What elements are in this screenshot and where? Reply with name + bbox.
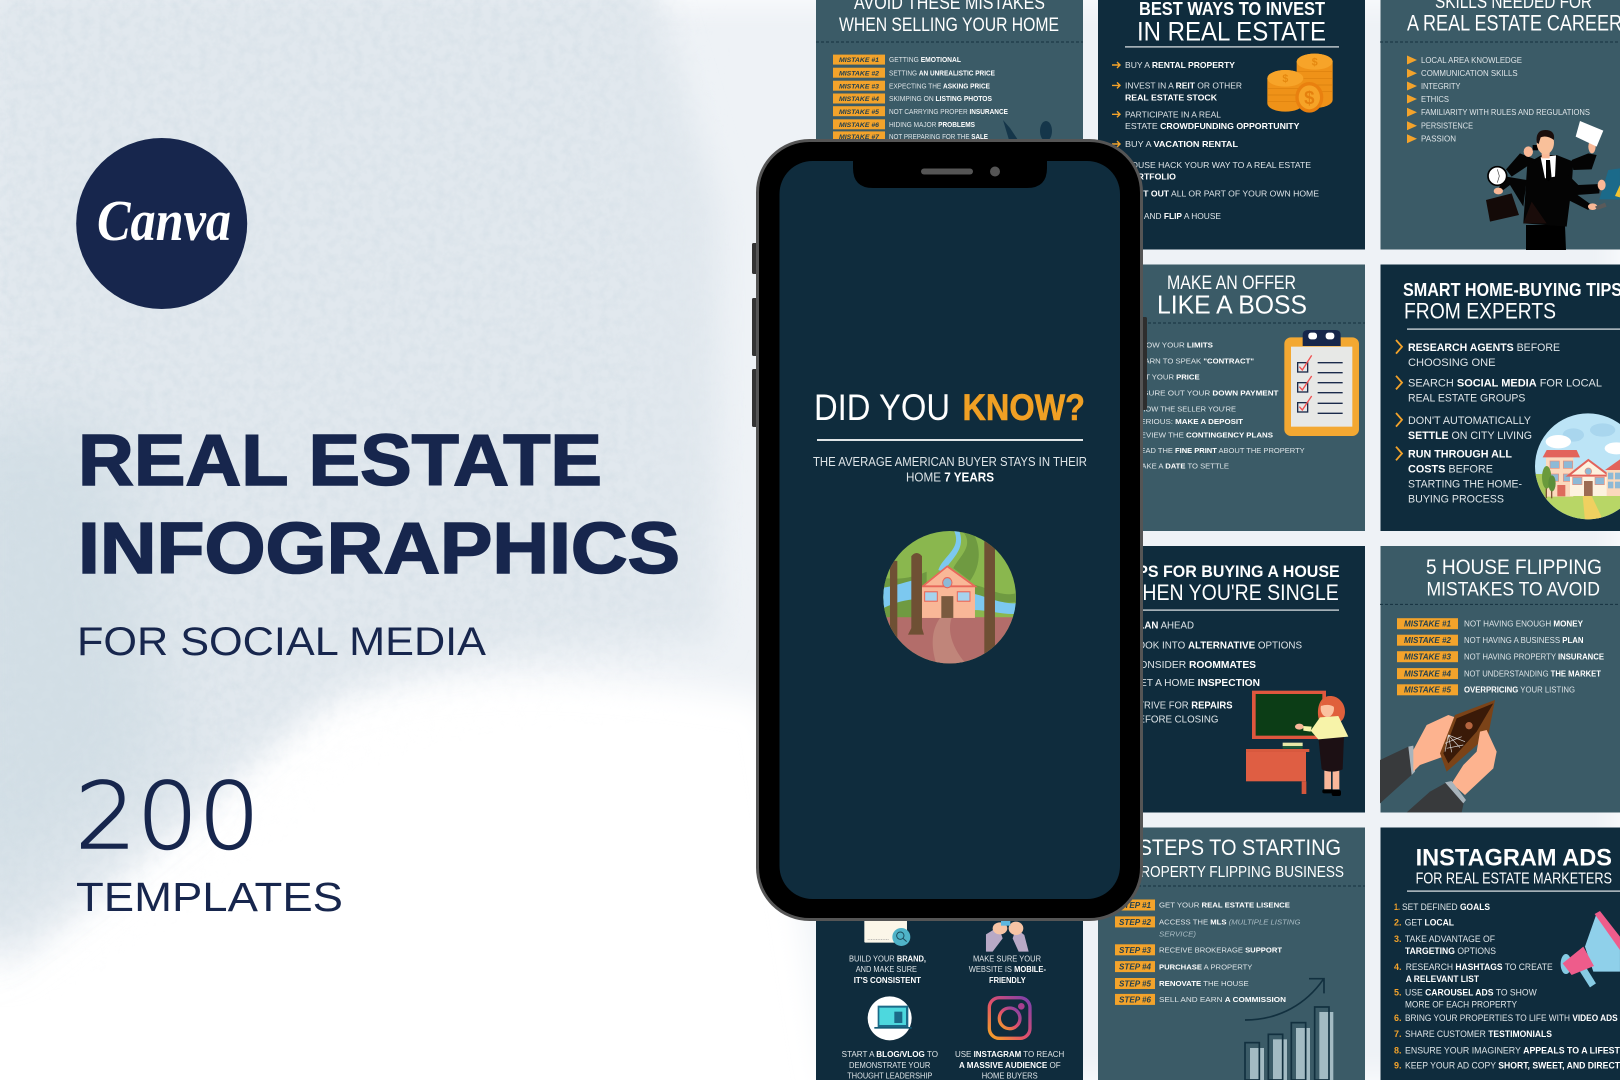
mistake list: MISTAKE #5 (839, 109, 879, 116)
brand tip: AND MAKE SURE (856, 965, 917, 974)
steps list: SERVICE) (1159, 929, 1197, 938)
panel: best ways to invest (1098, 0, 1365, 250)
subtitle: FOR SOCIAL MEDIA (77, 620, 486, 664)
skills list: ETHICS (1421, 95, 1449, 104)
illustration: teacher at chalkboard (1246, 691, 1348, 796)
tips list: LOOK INTO ALTERNATIVE OPTIONS (1132, 640, 1302, 651)
list: PORTFOLIO (1125, 172, 1176, 182)
numbered list: A RELEVANT LIST (1406, 974, 1479, 984)
panel: make an offer like a boss (1098, 264, 1365, 531)
phone body (758, 140, 1142, 920)
heading (1157, 273, 1307, 319)
template count: TEMPLATES (76, 874, 343, 920)
tips list: STARTING THE HOME- (1408, 478, 1522, 490)
title: Real Estate Infographics: REAL ESTATE (78, 421, 602, 501)
list: BUY A VACATION RENTAL (1125, 139, 1238, 149)
statistic text: THE AVERAGE AMERICAN BUYER STAYS IN THEIR (813, 454, 1087, 469)
mistake list: MISTAKE #6 (839, 122, 879, 129)
checklist text: LEARN TO SPEAK "CONTRACT" (1135, 357, 1254, 366)
heading (1407, 844, 1620, 892)
numbered list: 5. (1394, 988, 1402, 998)
checklist text (1135, 340, 1305, 471)
mistake list (1397, 618, 1605, 695)
heading: A PROPERTY FLIPPING BUSINESS (1119, 864, 1344, 881)
mistake list: MISTAKE #2 (839, 70, 879, 77)
list: REAL ESTATE STOCK (1125, 92, 1218, 102)
heading (839, 0, 1059, 36)
numbered list: TAKE ADVANTAGE OF (1405, 934, 1495, 944)
icon: coin stacks: $ (1312, 56, 1318, 68)
heading: did you know (814, 387, 1085, 441)
numbered list: 3. (1394, 934, 1402, 944)
skills list: COMMUNICATION SKILLS (1421, 69, 1518, 78)
tips list: RUN THROUGH ALL (1408, 448, 1512, 460)
tips list: SEARCH SOCIAL MEDIA FOR LOCAL (1408, 378, 1602, 390)
list: ESTATE CROWDFUNDING OPPORTUNITY (1125, 121, 1300, 131)
statistic text: HOME 7 YEARS (906, 470, 994, 485)
tips list: PLAN AHEAD (1132, 621, 1194, 632)
panel: 5 house flipping mistakes (1380, 546, 1620, 812)
brand tip: IT'S CONSISTENT (854, 976, 921, 985)
numbered list: 6. (1394, 1013, 1402, 1023)
steps list: STEP #5 (1119, 980, 1152, 988)
numbered list: KEEP YOUR AD COPY SHORT, SWEET, AND DIRECT (1405, 1060, 1620, 1070)
mistake list: SETTING AN UNREALISTIC PRICE (889, 70, 995, 77)
heading (1123, 562, 1340, 611)
mistake list: HIDING MAJOR PROBLEMS (889, 122, 975, 129)
numbered list: SHARE CUSTOMER TESTIMONIALS (1405, 1029, 1552, 1039)
panel: tips for buying a house when single (1098, 546, 1365, 812)
numbered list: RESEARCH HASHTAGS TO CREATE (1406, 962, 1553, 972)
tips list: SETTLE ON CITY LIVING (1408, 430, 1532, 442)
logo: Canva badge (76, 138, 247, 309)
numbered list: 9. (1394, 1060, 1402, 1070)
list: RENT OUT ALL OR PART OF YOUR OWN HOME (1125, 188, 1319, 198)
checklist text: REVIEW THE CONTINGENCY PLANS (1135, 430, 1273, 439)
steps list: SELL AND EARN A COMMISSION (1159, 995, 1286, 1004)
heading: INSTAGRAM ADS (1416, 844, 1612, 871)
panel: online presence tips (816, 800, 1083, 1080)
mistake list: SKIMPING ON LISTING PHOTOS (889, 96, 992, 103)
heading: 5 HOUSE FLIPPING (1426, 556, 1602, 579)
skills list (1407, 56, 1590, 144)
icon: clipboard (1284, 330, 1359, 436)
list: INVEST IN A REIT OR OTHER (1125, 80, 1242, 90)
list: BUY A RENTAL PROPERTY (1125, 60, 1235, 70)
tips list: CHOOSING ONE (1408, 357, 1496, 369)
tips list (1396, 340, 1602, 506)
steps list: STEP #2 (1119, 918, 1152, 927)
numbered list: 4. (1394, 962, 1402, 972)
illustration: house in circle (1533, 412, 1620, 523)
title: Real Estate Infographics (78, 421, 680, 589)
mistake list: NOT HAVING ENOUGH MONEY (1464, 620, 1584, 629)
mobile-friendly tip: FRIENDLY (989, 976, 1026, 985)
tips list: DON'T AUTOMATICALLY (1408, 415, 1532, 427)
phone screen (780, 161, 1120, 899)
tips list: STRIVE FOR REPAIRS (1132, 701, 1233, 712)
mistake list: MISTAKE #2 (1404, 636, 1452, 645)
mistake list: OVERPRICING YOUR LISTING (1464, 686, 1575, 695)
chart: rising bars with arrow (1245, 979, 1333, 1080)
heading (1125, 0, 1339, 48)
illustration: forest house in circle (880, 528, 1020, 666)
mistake list: MISTAKE #5 (1404, 686, 1452, 695)
brand tip (849, 917, 926, 985)
phone side buttons (752, 243, 1147, 427)
numbered list (1394, 902, 1620, 1070)
phone notch (853, 159, 1047, 188)
numbered list: 7. (1394, 1029, 1402, 1039)
mistake list (833, 55, 1008, 141)
heading: MISTAKES TO AVOID (1426, 580, 1600, 600)
list: HOUSE HACK YOUR WAY TO A REAL ESTATE (1125, 160, 1311, 170)
steps list: STEP #1 (1119, 901, 1152, 910)
tips list: REAL ESTATE GROUPS (1408, 393, 1525, 405)
skills list: LOCAL AREA KNOWLEDGE (1421, 56, 1522, 65)
blog and vlog tip: START A BLOG/VLOG TO (842, 1050, 938, 1059)
illustration: empty wallet in hands (1380, 700, 1497, 812)
skills list: PASSION (1421, 135, 1456, 144)
numbered list: USE CAROUSEL ADS TO SHOW (1405, 988, 1537, 998)
mistake list: NOT HAVING PROPERTY INSURANCE (1464, 653, 1605, 662)
checklist text: SHOW THE SELLER YOU'RE (1135, 404, 1236, 414)
tips list: CONSIDER ROOMMATES (1132, 660, 1256, 671)
numbered list: SET DEFINED GOALS (1402, 902, 1490, 912)
steps list: RENOVATE THE HOUSE (1159, 979, 1249, 988)
heading: 5 STEPS TO STARTING (1122, 835, 1341, 860)
icon: coin stacks: $ (1304, 87, 1315, 108)
left column: logo and headings (75, 138, 680, 920)
heading: MAKE AN OFFER (1167, 273, 1296, 294)
numbered list: GET LOCAL (1405, 917, 1454, 927)
checklist text: READ THE FINE PRINT ABOUT THE PROPERTY (1135, 446, 1305, 455)
steps list: STEP #3 (1119, 946, 1152, 955)
checklist text: SERIOUS: MAKE A DEPOSIT (1135, 417, 1243, 426)
mistake list: NOT HAVING A BUSINESS PLAN (1464, 636, 1584, 645)
mistake list: NOT CARRYING PROPER INSURANCE (889, 109, 1008, 116)
mistake list: MISTAKE #3 (1404, 653, 1452, 662)
mistake list: NOT UNDERSTANDING THE MARKET (1464, 670, 1601, 678)
mistake list: NOT PREPARING FOR THE SALE (889, 134, 988, 141)
skills list: FAMILIARITY WITH RULES AND REGULATIONS (1421, 108, 1590, 117)
illustration: silhouettes (1003, 120, 1052, 141)
panel: skills needed for a real estate career (1380, 0, 1620, 250)
steps list: GET YOUR REAL ESTATE LISENCE (1159, 901, 1290, 910)
tips list: COSTS BEFORE (1408, 464, 1493, 476)
checklist text: SET YOUR PRICE (1135, 373, 1200, 382)
tips list: BEFORE CLOSING (1132, 714, 1219, 725)
mistake list: MISTAKE #1 (1404, 620, 1452, 629)
template count (75, 763, 343, 920)
checklist text: KNOW YOUR LIMITS (1135, 340, 1213, 349)
instagram tip: A MASSIVE AUDIENCE OF (959, 1061, 1061, 1070)
mistake list: MISTAKE #3 (839, 83, 879, 90)
tips list: BUYING PROCESS (1408, 494, 1504, 506)
list: BUY AND FLIP A HOUSE (1125, 211, 1221, 221)
mistake list: MISTAKE #1 (839, 57, 879, 64)
list (1112, 60, 1319, 221)
skills list: INTEGRITY (1421, 82, 1461, 91)
icon: coin stacks (1267, 54, 1333, 113)
tips list: GET A HOME INSPECTION (1132, 678, 1260, 689)
checklist text: FIGURE OUT YOUR DOWN PAYMENT (1135, 389, 1279, 398)
panel: instagram ads for real estate marketers (1380, 828, 1620, 1080)
template count: 200 (75, 763, 260, 870)
mistake list: EXPECTING THE ASKING PRICE (889, 83, 990, 90)
instagram tip: USE INSTAGRAM TO REACH (955, 1050, 1065, 1059)
illustration: multitasking businessman (1486, 121, 1620, 250)
heading: WHEN SELLING YOUR HOME (839, 15, 1059, 36)
heading (1119, 835, 1344, 881)
heading (1403, 280, 1620, 330)
steps list: RECEIVE BROKERAGE SUPPORT (1159, 946, 1282, 954)
mistake list: GETTING EMOTIONAL (889, 57, 962, 64)
list: PARTICIPATE IN A REAL (1125, 109, 1221, 119)
heading: WHEN YOU'RE SINGLE (1124, 580, 1339, 605)
brand tip: BUILD YOUR BRAND, (849, 954, 926, 964)
mistake list: MISTAKE #4 (1404, 670, 1452, 678)
steps list: STEP #4 (1119, 963, 1152, 972)
mobile-friendly tip: WEBSITE IS MOBILE- (969, 965, 1046, 974)
tips list (1132, 621, 1302, 725)
tips list: RESEARCH AGENTS BEFORE (1408, 342, 1560, 354)
steps list: PURCHASE A PROPERTY (1159, 962, 1252, 971)
panel: steps to starting a property flipping business (1098, 828, 1365, 1080)
heading: LIKE A BOSS (1157, 289, 1307, 319)
heading: TIPS FOR BUYING A HOUSE (1123, 562, 1340, 581)
steps list: STEP #6 (1119, 995, 1152, 1004)
icon: megaphone (1561, 911, 1620, 987)
logo: Canva badge: Canva (97, 188, 231, 253)
numbered list: TARGETING OPTIONS (1405, 946, 1496, 956)
blog and vlog tip: DEMONSTRATE YOUR (849, 1061, 931, 1070)
mobile-friendly tip (969, 921, 1046, 985)
heading (1426, 556, 1602, 600)
mistake list: MISTAKE #7 (839, 134, 879, 141)
panel: smart home-buying tips (1380, 264, 1620, 531)
heading: FROM EXPERTS (1404, 298, 1556, 324)
heading: did you know: KNOW? (962, 387, 1085, 428)
mistake list: MISTAKE #4 (839, 96, 879, 103)
numbered list: BRING YOUR PROPERTIES TO LIFE WITH VIDEO ADS (1405, 1013, 1618, 1023)
title: Real Estate Infographics: INFOGRAPHICS (78, 509, 680, 589)
heading: IN REAL ESTATE (1137, 16, 1326, 46)
phone mockup (752, 140, 1147, 920)
instagram tip (955, 998, 1065, 1080)
numbered list: 8. (1394, 1045, 1402, 1055)
checklist text: MAKE A DATE TO SETTLE (1135, 462, 1229, 471)
skills list: PERSISTENCE (1421, 122, 1473, 131)
steps list: ACCESS THE MLS (MULTIPLE LISTING (1159, 918, 1301, 927)
numbered list: 2. (1394, 917, 1402, 927)
heading: did you know: DID YOU (814, 387, 950, 428)
mobile-friendly tip: MAKE SURE YOUR (973, 954, 1041, 964)
panel: avoid these mistakes (816, 0, 1083, 250)
numbered list: MORE OF EACH PROPERTY (1405, 1000, 1517, 1010)
steps list (1115, 900, 1301, 1005)
blog and vlog tip (842, 996, 938, 1080)
statistic text (813, 454, 1087, 485)
icon: coin stacks: $ (1282, 73, 1288, 85)
numbered list: 1. (1394, 902, 1400, 912)
